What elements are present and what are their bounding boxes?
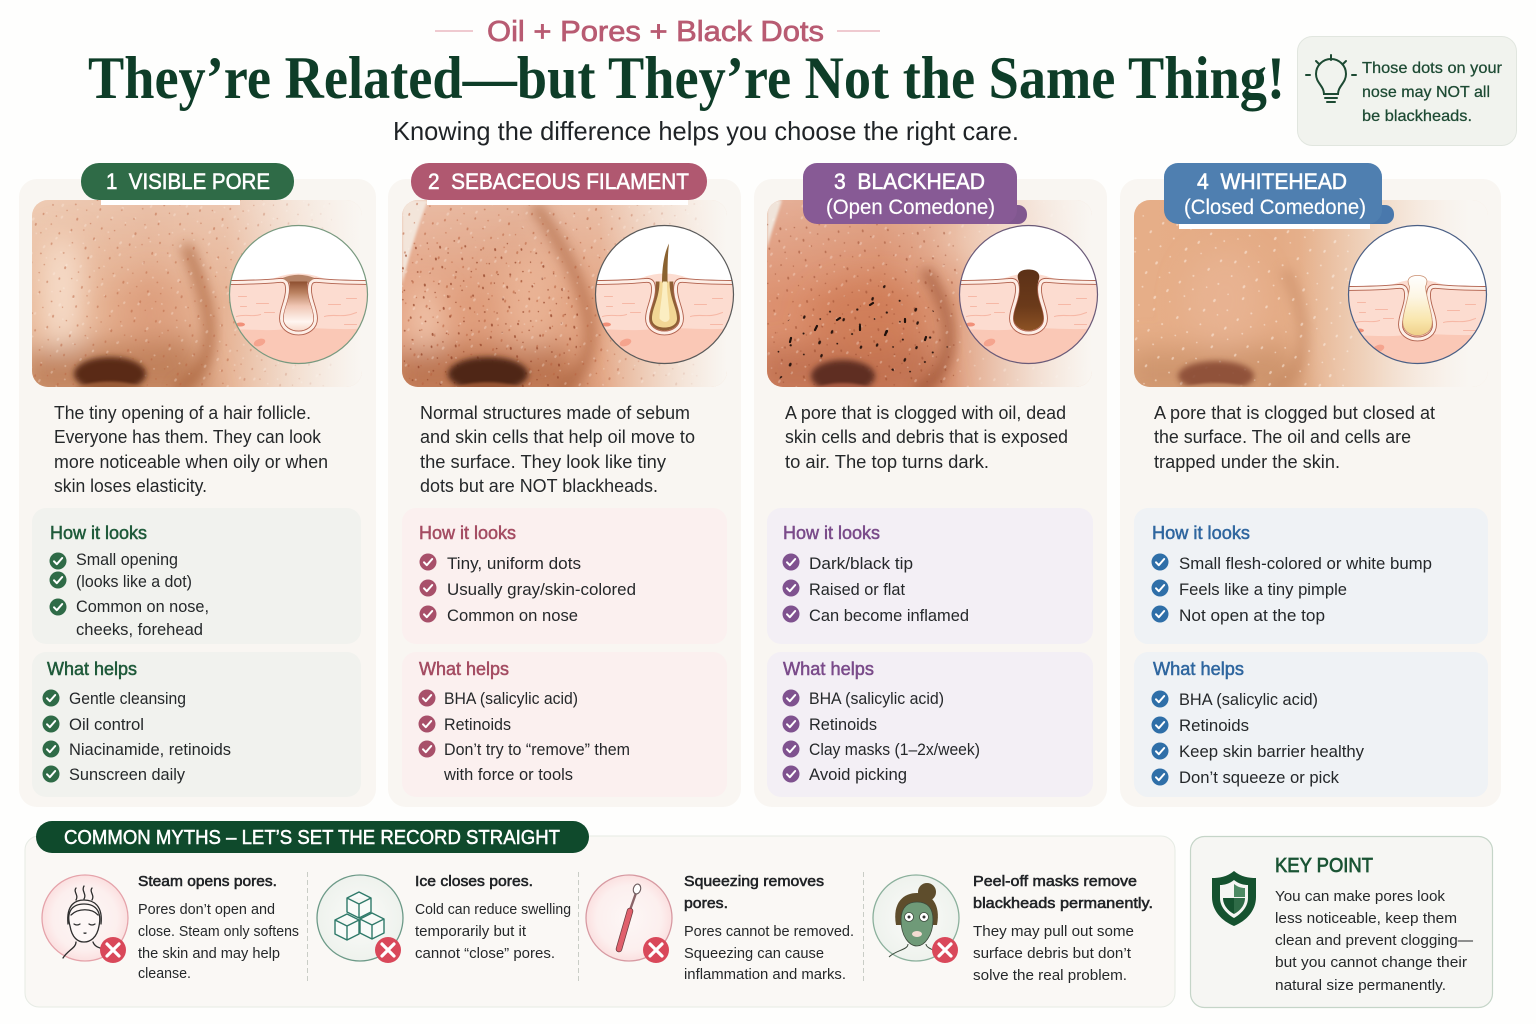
how it looks box: How it looks — [783, 523, 880, 543]
icon: shield — [1212, 871, 1256, 926]
what helps box: Keep skin barrier healthy — [1179, 743, 1365, 761]
icon: ice cubes — [317, 875, 403, 961]
key point text: natural size permanently. — [1275, 977, 1446, 994]
myth text: solve the real problem. — [973, 967, 1127, 984]
description: and skin cells that help oil move to — [420, 427, 695, 447]
what helps box: Oil control — [69, 716, 144, 734]
panel: sebaceous filament — [388, 163, 744, 807]
myth text: Squeezing removes — [684, 873, 824, 890]
key point text: but you cannot change their — [1275, 954, 1467, 971]
what helps box — [402, 652, 727, 797]
description: Normal structures made of sebum — [420, 403, 690, 423]
myth text: blackheads permanently. — [973, 895, 1153, 912]
badge: blackhead — [803, 163, 1027, 224]
how it looks box: Raised or flat — [809, 581, 905, 599]
how it looks box: Tiny, uniform dots — [447, 555, 581, 573]
what helps box: BHA (salicylic acid) — [444, 690, 578, 708]
description: skin cells and debris that is exposed — [785, 427, 1068, 447]
myth text: Peel-off masks remove — [973, 873, 1137, 890]
description: The tiny opening of a hair follicle. — [54, 403, 311, 423]
description: the surface. The oil and cells are — [1154, 427, 1411, 447]
what helps box: Niacinamide, retinoids — [69, 741, 231, 759]
myth: ice — [317, 873, 571, 963]
how it looks box: How it looks — [50, 523, 147, 543]
myth: squeezing — [586, 873, 854, 983]
myth text — [684, 873, 854, 983]
photo: nose with whiteheads — [1134, 200, 1442, 387]
what helps box: Gentle cleansing — [69, 690, 186, 708]
description — [1154, 403, 1435, 472]
callout: tip box — [1298, 36, 1516, 146]
badge: visible pore: 1 VISIBLE PORE — [106, 169, 270, 194]
myth text: cannot “close” pores. — [415, 945, 555, 962]
key point heading: KEY POINT — [1275, 855, 1373, 877]
what helps box: What helps — [47, 659, 137, 679]
icon: woman with steam — [42, 875, 128, 961]
myth text: Cold can reduce swelling — [415, 901, 571, 918]
panel: key point — [1190, 836, 1492, 1008]
title: They’re Related—but They’re Not the Same Thing! — [88, 45, 1285, 111]
photo: nose with sebaceous filaments — [390, 200, 727, 400]
diagram: empty pore cross-section — [228, 224, 368, 364]
tip text — [1362, 60, 1503, 125]
key point text: less noticeable, keep them — [1275, 910, 1457, 927]
myth text: temporarily but it — [415, 923, 527, 940]
what helps box: Clay masks (1–2x/week) — [809, 741, 980, 759]
myth text: Pores don’t open and — [138, 901, 275, 918]
how it looks box: Common on nose, — [76, 598, 209, 616]
subtitle: Knowing the difference helps you choose the right care. — [393, 116, 1019, 146]
myths banner: COMMON MYTHS – LET’S SET THE RECORD STRAIGHT — [64, 827, 560, 849]
white strip under badge — [1179, 224, 1370, 229]
myth: peel-off mask — [873, 873, 1153, 984]
description: trapped under the skin. — [1154, 452, 1340, 472]
description: A pore that is clogged but closed at — [1154, 403, 1435, 423]
what helps box: Retinoids — [1179, 717, 1249, 735]
how it looks box: Small opening — [76, 551, 178, 569]
description: the surface. They look like tiny — [420, 452, 666, 472]
what helps box: What helps — [1153, 659, 1244, 679]
panel: visible pore — [19, 163, 378, 807]
how it looks box: How it looks — [419, 523, 516, 543]
myth text: close. Steam only softens — [138, 923, 299, 940]
how it looks box: cheeks, forehead — [76, 621, 203, 639]
myth text: inflammation and marks. — [684, 966, 846, 983]
badge: visible pore — [81, 163, 294, 200]
badge: blackhead: (Open Comedone) — [826, 196, 995, 219]
myth text: pores. — [684, 895, 728, 912]
badge: whitehead — [1164, 163, 1394, 224]
what helps box: Don’t try to “remove” them — [444, 741, 630, 759]
myth text: Squeezing can cause — [684, 945, 824, 962]
how it looks box: How it looks — [1152, 523, 1250, 543]
diagram: whitehead cross-section — [1348, 224, 1488, 364]
myth text — [415, 873, 571, 962]
tip text: be blackheads. — [1362, 108, 1472, 125]
myth text — [973, 873, 1153, 984]
myth text — [138, 873, 299, 982]
myth text: Ice closes pores. — [415, 873, 533, 890]
what helps box: Avoid picking — [809, 766, 907, 784]
diagram: blackhead cross-section — [958, 224, 1098, 364]
panel: common myths — [25, 821, 1175, 1007]
photo: nose with visible pores — [20, 200, 362, 400]
white strip under badge — [427, 200, 688, 205]
what helps box: Sunscreen daily — [69, 766, 186, 784]
badge: blackhead: 3 BLACKHEAD — [834, 169, 985, 194]
what helps box: Retinoids — [809, 716, 877, 734]
key point text — [1275, 888, 1473, 994]
kicker: Oil + Pores + Black Dots: Oil + Pores + Black Dots — [487, 16, 824, 48]
description: to air. The top turns dark. — [785, 452, 989, 472]
myth text: surface debris but don’t — [973, 945, 1132, 962]
description: more noticeable when oily or when — [54, 452, 328, 472]
what helps box — [767, 652, 1093, 797]
how it looks box: Small flesh-colored or white bump — [1179, 555, 1432, 573]
tip text: nose may NOT all — [1362, 84, 1490, 101]
description — [785, 403, 1068, 472]
how it looks box: Feels like a tiny pimple — [1179, 581, 1347, 599]
what helps box: What helps — [783, 659, 874, 679]
myth: steam — [42, 873, 299, 982]
how it looks box — [1134, 508, 1488, 644]
myth text: They may pull out some — [973, 923, 1134, 940]
myth text: cleanse. — [138, 965, 191, 982]
how it looks box: Common on nose — [447, 607, 578, 625]
how it looks box — [32, 508, 361, 644]
myth text: Steam opens pores. — [138, 873, 277, 890]
what helps box — [32, 652, 361, 797]
how it looks box: Can become inflamed — [809, 607, 969, 625]
what helps box: BHA (salicylic acid) — [809, 690, 944, 708]
header — [88, 16, 1285, 146]
what helps box: Don’t squeeze or pick — [1179, 769, 1340, 787]
what helps box: Retinoids — [444, 716, 511, 734]
what helps box: BHA (salicylic acid) — [1179, 691, 1318, 709]
icon: woman in green face mask — [873, 875, 959, 961]
description: skin loses elasticity. — [54, 476, 207, 496]
what helps box: with force or tools — [443, 766, 573, 784]
description: A pore that is clogged with oil, dead — [785, 403, 1066, 423]
key point text: clean and prevent clogging— — [1275, 932, 1473, 949]
key point text: You can make pores look — [1275, 888, 1446, 905]
myth text: the skin and may help — [138, 945, 280, 962]
how it looks box: (looks like a dot) — [76, 573, 192, 591]
badge: whitehead: (Closed Comedone) — [1184, 196, 1366, 219]
panel: blackhead — [754, 163, 1108, 807]
badge: sebaceous filament: 2 SEBACEOUS FILAMENT — [428, 169, 689, 194]
badge: sebaceous filament — [411, 163, 707, 200]
description: dots but are NOT blackheads. — [420, 476, 658, 496]
how it looks box: Usually gray/skin-colored — [447, 581, 636, 599]
what helps box: What helps — [419, 659, 509, 679]
badge: whitehead: 4 WHITEHEAD — [1197, 169, 1347, 194]
how it looks box: Not open at the top — [1179, 607, 1325, 625]
description: Everyone has them. They can look — [54, 427, 322, 447]
panel: whitehead — [1120, 163, 1501, 807]
icon: extractor tool — [586, 875, 672, 961]
photo: nose with blackheads — [755, 200, 1092, 400]
description — [54, 403, 328, 496]
how it looks box — [402, 508, 727, 644]
myths banner — [36, 821, 589, 853]
white strip under badge — [101, 200, 240, 205]
myth text: Pores cannot be removed. — [684, 923, 854, 940]
how it looks box: Dark/black tip — [809, 555, 913, 573]
diagram: filament cross-section — [594, 224, 734, 364]
what helps box — [1134, 652, 1488, 797]
tip text: Those dots on your — [1362, 60, 1503, 77]
icon: light bulb — [1306, 55, 1356, 102]
description — [420, 403, 695, 496]
how it looks box — [767, 508, 1093, 644]
